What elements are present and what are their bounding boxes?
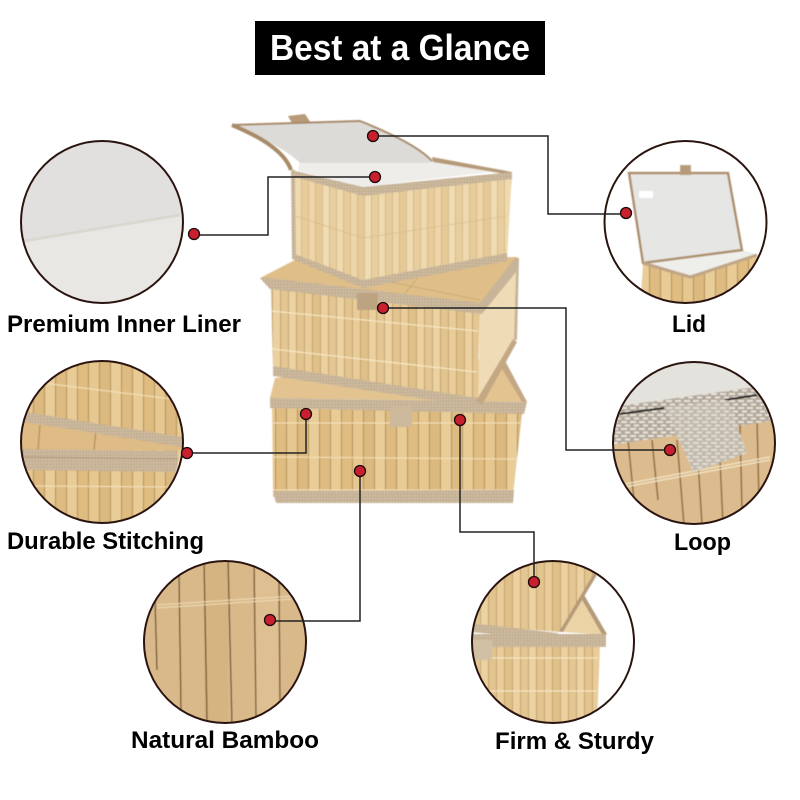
top box	[232, 114, 512, 288]
label: premium inner liner: Premium Inner Liner	[7, 311, 241, 338]
bottom box	[270, 357, 527, 503]
detail circle: durable stitching	[20, 360, 186, 525]
detail circle: premium inner liner	[20, 141, 184, 310]
label: loop: Loop	[674, 529, 731, 556]
detail circle: lid	[604, 141, 768, 310]
detail circle: firm and sturdy	[470, 558, 638, 726]
label: natural bamboo: Natural Bamboo	[131, 727, 319, 754]
callout line: loop	[383, 308, 670, 450]
label: firm and sturdy: Firm & Sturdy	[495, 728, 655, 755]
callout markers: red dots	[182, 130, 676, 626]
detail circle: loop	[612, 360, 777, 526]
detail circle: natural bamboo	[142, 558, 308, 726]
title: Best at a Glance	[270, 27, 530, 68]
callout line: natural bamboo	[270, 471, 360, 621]
callout line: stitching	[187, 414, 306, 453]
middle box	[260, 257, 519, 407]
label: durable stitching: Durable Stitching	[7, 528, 204, 555]
callout line: inner liner	[194, 177, 375, 235]
callout line: lid	[373, 136, 626, 214]
product: stacked bamboo boxes	[232, 114, 527, 503]
callout line: firm and sturdy	[460, 420, 534, 582]
label: lid: Lid	[672, 311, 706, 338]
